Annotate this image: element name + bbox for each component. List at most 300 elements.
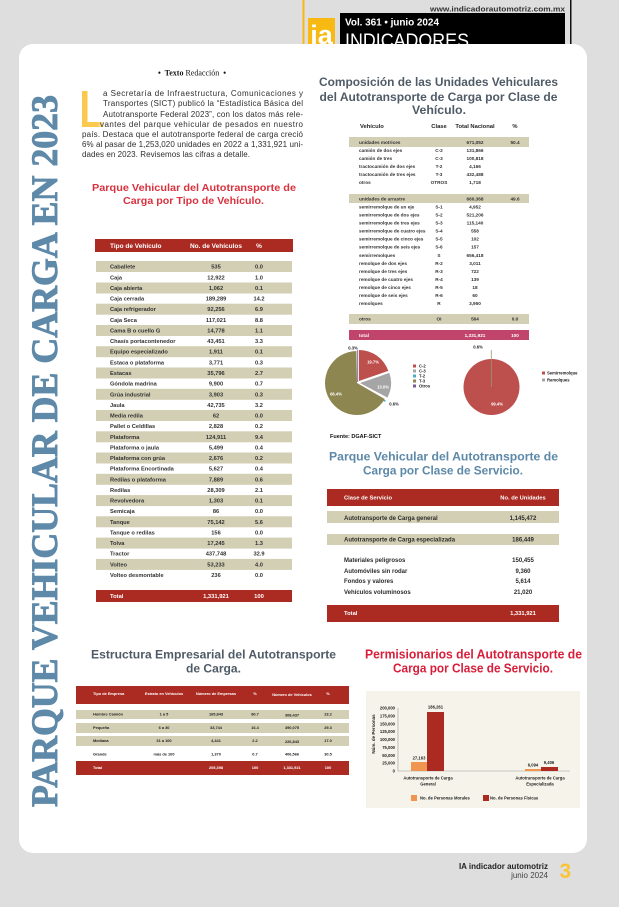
table rows: Tanque o redilas — [110, 530, 155, 536]
table rows: 189,289 — [206, 297, 226, 303]
table rows: 1.0 — [255, 275, 263, 281]
table: business structure — [76, 686, 349, 775]
table rows: 8.8 — [255, 318, 263, 324]
table rows: 1.3 — [255, 541, 263, 547]
section: motor units: 1,718 — [469, 180, 481, 185]
section: trailer units: 60 — [472, 293, 478, 298]
heading: business structure: Estructura Empresarial del Autotransporte — [91, 648, 336, 662]
table rows: 0.4 — [255, 467, 264, 473]
total row — [76, 761, 349, 775]
table header: % — [326, 691, 330, 696]
general cargo row — [327, 511, 559, 523]
table rows: 1,911 — [209, 350, 223, 356]
table rows: Cama B o cuello G — [110, 328, 161, 334]
table rows: Tolva — [110, 541, 125, 547]
table rows: 1,303 — [209, 499, 223, 505]
section: trailer units: remolque de tres ejes — [359, 269, 408, 274]
table rows: 35,796 — [207, 371, 225, 377]
heading: permit holders — [365, 648, 582, 676]
table rows: 2,828 — [209, 424, 223, 430]
section: trailer units: 139 — [471, 277, 479, 282]
table header: % — [256, 243, 262, 250]
table rows: 236 — [211, 573, 221, 579]
table rows: Plataforma Encortinada — [110, 467, 175, 473]
y axis labels: 0 — [393, 768, 396, 774]
table rows: 0.0 — [255, 414, 263, 420]
heading: vehicle class composition: Vehículo. — [412, 103, 466, 117]
section: motor units: 50.4 — [510, 140, 520, 145]
pie labels — [330, 346, 399, 406]
table rows: 23.2 — [324, 712, 333, 716]
specialised cargo row: Autotransporte de Carga especializada — [344, 538, 456, 544]
table rows: 31 a 100 — [156, 738, 172, 743]
section: motor units: 4,166 — [469, 164, 481, 169]
footer — [459, 860, 571, 883]
table rows: Caja refrigerador — [110, 307, 157, 313]
table rows: 0.2 — [255, 456, 263, 462]
heading: permit holders: Carga por Clase de Servicio. — [393, 662, 553, 676]
section: trailer units: R-5 — [435, 285, 443, 290]
total row: Total — [93, 765, 102, 770]
total row: 100 — [511, 333, 519, 338]
others row: otros — [359, 316, 371, 322]
table rows: 1,062 — [209, 286, 223, 292]
pie labels: 19.7% — [367, 360, 379, 364]
table rows: 1,370 — [211, 752, 221, 756]
bars: specialised cargo: 9,406 — [544, 760, 555, 765]
section: trailer units: 115,140 — [467, 220, 484, 226]
table rows: 4,441 — [211, 738, 222, 743]
table rows: 86 — [213, 509, 219, 515]
chart legend: No. de Personas Físicas — [490, 796, 539, 800]
heading: vehicle type: Carga por Tipo de Vehículo. — [123, 195, 264, 207]
table rows: Estacas — [110, 371, 132, 377]
table rows: Caballete — [110, 265, 135, 271]
table rows: Plataforma — [110, 435, 140, 441]
axes — [398, 708, 570, 771]
table rows: 2.1 — [255, 488, 263, 494]
table rows: 117,021 — [206, 318, 226, 324]
section: trailer units: 558 — [471, 228, 479, 234]
table rows: Redilas — [110, 488, 130, 494]
table header: Número de Vehículos — [272, 692, 312, 697]
heading: business structure: de Carga. — [186, 662, 241, 676]
table rows: 124,911 — [206, 435, 226, 441]
section: trailer units: remolque de cuatro ejes — [359, 277, 413, 282]
table rows: 406,566 — [285, 752, 300, 756]
table rows: 0.1 — [255, 286, 263, 292]
table rows: 226,843 — [285, 739, 300, 744]
pie legend: T-2 — [419, 374, 426, 378]
general cargo row: Autotransporte de Carga general — [344, 516, 438, 522]
pie legend: Otros — [419, 384, 431, 388]
category labels: General — [420, 782, 436, 786]
table rows: 0.1 — [255, 499, 263, 505]
specialised breakdown rows — [344, 558, 534, 596]
table rows: Equipo especializado — [110, 350, 168, 356]
table rows: 14,778 — [207, 328, 225, 334]
table total row: 1,331,921 — [203, 594, 230, 600]
section: motor units — [349, 137, 529, 185]
section: trailer units: remolques — [359, 301, 383, 306]
bars: general cargo: 27,163 — [413, 756, 426, 760]
remolques sliver — [490, 350, 492, 387]
bars: specialised cargo — [525, 760, 558, 771]
table rows — [93, 712, 333, 756]
intro paragraph — [82, 89, 304, 159]
section: trailer units: remolque de cinco ejes — [359, 285, 411, 290]
table rows: Caja Seca — [110, 318, 138, 324]
source note: Fuente: DGAF-SICT — [330, 434, 382, 440]
y axis labels: 75,000 — [382, 745, 396, 750]
others row: 0.0 — [512, 316, 519, 322]
section: trailer units: 722 — [471, 269, 479, 274]
section: motor units: C-2 — [435, 148, 443, 153]
table row stripes — [96, 261, 292, 570]
table rows: 0.7 — [255, 382, 263, 388]
heading: vehicle class composition: del Autotransporte de Carga por Clase de — [320, 90, 558, 104]
slice C-3 — [360, 373, 391, 398]
section: trailer units: semirremolque de un eje — [359, 204, 415, 210]
table rows: 165,843 — [209, 712, 224, 716]
table rows: Volteo desmontable — [110, 573, 164, 579]
intro paragraph: país. Destaca que el autotransporte federal de carga creció — [82, 130, 304, 139]
total row: total — [359, 333, 369, 338]
total row: 100 — [252, 765, 258, 770]
table header — [95, 239, 293, 252]
pie labels — [473, 344, 503, 406]
table rows: 4.0 — [255, 562, 263, 568]
section: trailer units: 18 — [472, 285, 478, 290]
heading: service class: Carga por Clase de Servicio. — [363, 464, 523, 478]
table header: Tipo de Empresa — [93, 691, 125, 696]
table header: % — [512, 124, 518, 130]
pie labels: 99.4% — [491, 402, 503, 406]
pie labels: 0.3% — [348, 346, 358, 350]
section: trailer units: remolque de seis ejes — [359, 293, 408, 298]
table rows: 14.2 — [253, 297, 265, 303]
table rows: 0.7 — [252, 752, 258, 756]
section: trailer units: 521,206 — [467, 212, 484, 218]
table rows: 17.0 — [324, 738, 332, 743]
total row — [327, 605, 559, 622]
intro paragraph: vantes del parque vehicular de pesados en nuestro — [100, 120, 304, 129]
slice C-2 — [359, 350, 388, 381]
table rows: 0.0 — [255, 573, 263, 579]
table rows: Media redila — [110, 414, 144, 420]
table header — [360, 124, 518, 130]
table rows: 53,233 — [207, 562, 225, 568]
pie legend: Remolques — [547, 378, 570, 382]
table rows: Plataforma o jaula — [110, 445, 160, 451]
website url: www.indicadorautomotriz.com.mx — [429, 4, 566, 14]
section: trailer units: R — [437, 301, 441, 306]
heading: vehicle type — [92, 182, 296, 207]
heading: service class — [329, 450, 558, 478]
table rows: 17,245 — [207, 541, 225, 547]
table rows: 3.3 — [255, 339, 263, 345]
y axis labels: 125,000 — [380, 729, 396, 734]
table: vehicles by type — [95, 239, 293, 602]
section: trailer units: R-2 — [435, 261, 443, 266]
drop cap letter L — [82, 91, 104, 127]
bars: general cargo: 186,261 — [428, 704, 444, 710]
pie legend: C-3 — [419, 368, 426, 374]
section: trailer units: unidades de arrastre — [359, 196, 406, 202]
table rows: Mediana — [93, 738, 109, 743]
table rows: 3,771 — [209, 360, 223, 366]
table rows: 6 a 30 — [159, 725, 169, 730]
section: trailer units: 3,011 — [469, 261, 481, 266]
table rows: 75,142 — [207, 520, 225, 526]
table rows: Chasís portacontenedor — [110, 339, 176, 345]
y axis labels: 200,000 — [380, 706, 396, 710]
table total row: 100 — [254, 594, 264, 600]
chart panel — [366, 691, 580, 808]
table header: Tipo de Vehículo — [110, 243, 162, 250]
table rows: Revolvedora — [110, 499, 145, 505]
y axis labels: 50,000 — [382, 753, 396, 758]
table rows: 5.6 — [255, 520, 263, 526]
table header: Estrato en Vehículos — [145, 691, 183, 696]
table rows: Tractor — [110, 552, 130, 558]
black header band: Vol. 361 • junio 2024 — [345, 18, 439, 28]
table header: Vehículo — [360, 124, 384, 130]
table rows: Caja abierta — [110, 286, 143, 292]
section: trailer units: semirremolques — [359, 253, 396, 258]
section: motor units: tractocamión de dos ejes — [359, 164, 416, 169]
table: units by service class — [327, 489, 559, 622]
intro paragraph: dades en 2023. Revisemos las cifras a detalle. — [82, 150, 250, 159]
icon: ia logo: ia — [310, 20, 334, 50]
specialised cargo row: 186,449 — [512, 538, 534, 544]
pie chart: trailer units — [464, 344, 578, 415]
pie legend — [413, 364, 431, 388]
table rows: 0.2 — [255, 424, 263, 430]
table rows: 390,075 — [285, 725, 300, 730]
section: motor units: 671,052 — [467, 140, 484, 145]
table rows: 9.4 — [255, 435, 264, 441]
table total row: Total — [110, 594, 124, 600]
section: motor units: C-3 — [435, 156, 443, 161]
section: motor units: camión de tres — [359, 156, 392, 161]
heading: permit holders: Permisionarios del Autotransporte de — [365, 648, 582, 662]
others row: OI — [437, 316, 441, 322]
page number: 3 — [560, 860, 571, 883]
bar chart: permit holders — [366, 691, 580, 808]
table total row — [96, 590, 292, 602]
specialised breakdown rows: Automóviles sin rodar — [344, 569, 408, 575]
y axis labels: 150,000 — [380, 721, 396, 726]
table rows: 9,900 — [209, 382, 223, 388]
table rows: 43,451 — [207, 339, 225, 345]
bars: specialised cargo: 6,094 — [528, 762, 539, 768]
table rows: Redilas o plataforma — [110, 477, 167, 483]
table rows: 2.7 — [255, 371, 263, 377]
y axis labels: 175,000 — [380, 713, 396, 718]
section: trailer units: S — [437, 253, 441, 258]
pie labels: 0.6% — [389, 402, 399, 406]
section: motor units: 100,818 — [467, 156, 484, 161]
section: trailer units: S-5 — [435, 236, 443, 242]
slice T-3 — [325, 351, 385, 415]
table header: No. de Vehículos — [190, 243, 242, 250]
section: trailer units: 3,950 — [469, 301, 481, 306]
table: composition by vehicle class — [349, 124, 529, 340]
others row — [349, 314, 529, 324]
section: trailer units: 102 — [471, 236, 479, 242]
heading: business structure — [91, 648, 336, 676]
section: motor units: T-3 — [436, 172, 443, 177]
black header band — [340, 13, 565, 52]
category labels: Autotransporte de Carga — [403, 776, 453, 780]
table rows: Caja cerrada — [110, 297, 145, 303]
pie legend: Semirremolque — [547, 370, 578, 376]
section: motor units: T-2 — [436, 164, 443, 169]
section: trailer units: semirremolque de tres ejes — [359, 220, 420, 226]
heading: vehicle type: Parque Vehicular del Autotransporte de — [92, 182, 296, 194]
section: trailer units: remolque de dos ejes — [359, 261, 407, 266]
table rows: 30.5 — [324, 752, 333, 756]
section: trailer units: 4,952 — [469, 204, 481, 210]
table rows: 437,748 — [206, 552, 226, 558]
section: trailer units: 656,418 — [467, 253, 484, 258]
table rows: 92,256 — [207, 307, 225, 313]
table rows: Estaca o plataforma — [110, 360, 165, 366]
table rows: 0.3 — [255, 360, 263, 366]
table rows: 3,903 — [209, 392, 223, 398]
table header: % — [253, 691, 257, 696]
pie labels: 13.0% — [377, 384, 389, 390]
specialised breakdown rows: Fondos y valores — [344, 579, 394, 585]
table header: Total Nacional — [455, 124, 495, 130]
table rows: Caja — [110, 275, 123, 281]
specialised breakdown rows: Materiales peligrosos — [344, 558, 406, 564]
heading: service class: Parque Vehicular del Autotransporte de — [329, 450, 558, 464]
table rows: 0.0 — [255, 530, 263, 536]
others row: 564 — [471, 316, 479, 322]
specialised breakdown rows: 21,020 — [514, 590, 533, 596]
table rows: Tanque — [110, 520, 130, 526]
table rows: 5,627 — [209, 467, 223, 473]
table rows: 12,922 — [207, 275, 225, 281]
section: trailer units: S-4 — [435, 228, 443, 234]
table rows: 7,889 — [209, 477, 223, 483]
table rows: 535 — [211, 265, 221, 271]
table rows: Semicaja — [110, 509, 136, 515]
total row: 1,331,921 — [510, 611, 537, 617]
category labels: Especializada — [526, 782, 554, 786]
table header: No. de Unidades — [500, 496, 546, 502]
specialised cargo row — [327, 534, 559, 545]
slice otros — [357, 350, 359, 382]
section: trailer units: R-6 — [435, 293, 443, 298]
total row: Total — [344, 611, 358, 617]
table rows: 3.2 — [255, 403, 263, 409]
pie legend — [542, 370, 578, 382]
section: motor units: OTROS — [431, 180, 447, 185]
table header: Clase de Servicio — [344, 496, 392, 502]
table rows: 42,735 — [207, 403, 225, 409]
intro paragraph: Autotransporte Federal 2023”, con los datos más rele- — [103, 110, 303, 119]
table rows: Grande — [93, 752, 107, 756]
section: motor units: otros — [359, 180, 371, 185]
table rows: 28,309 — [207, 488, 225, 494]
section: trailer units: S-3 — [435, 220, 443, 226]
section: trailer units: semirremolque de dos ejes — [359, 212, 420, 218]
section: trailer units: S-6 — [435, 244, 443, 250]
total row: 100 — [325, 765, 331, 770]
row stripes — [76, 710, 349, 746]
section: motor units: unidades motrices — [359, 140, 401, 145]
slice T-2 — [358, 386, 385, 402]
table rows: 32.9 — [253, 552, 265, 558]
table rows: 5,499 — [209, 445, 223, 451]
table header: Clase — [431, 124, 448, 130]
magazine header — [302, 0, 572, 52]
section: motor units: 131,866 — [467, 148, 484, 153]
black header band: INDICADORES — [345, 31, 469, 52]
y axis labels: 25,000 — [382, 761, 396, 766]
total row — [349, 330, 529, 340]
bars: general cargo — [411, 704, 444, 771]
table rows: Pallet o Celdillas — [110, 424, 155, 430]
section: trailer units: R-3 — [435, 269, 443, 274]
table header — [327, 489, 559, 506]
section: motor units: 432,488 — [467, 172, 484, 177]
table rows: 0.6 — [255, 477, 263, 483]
y axis title: Núm. de Personas — [371, 714, 376, 754]
section: trailer units: semirremolque de cinco ejes — [359, 236, 424, 242]
total row: 1,331,921 — [283, 765, 301, 770]
total row: 1,331,921 — [465, 333, 486, 338]
specialised breakdown rows: 9,360 — [515, 569, 531, 575]
chart legend: No. de Personas Morales — [420, 796, 470, 800]
specialised breakdown rows: 150,455 — [512, 558, 534, 564]
section: trailer units: R-4 — [435, 277, 443, 282]
table rows: más de 100 — [154, 752, 174, 756]
section: trailer units: S-2 — [435, 212, 443, 218]
table header — [76, 686, 349, 704]
specialised breakdown rows: Vehículos voluminosos — [344, 590, 411, 596]
table rows: 33,744 — [210, 725, 223, 730]
vertical title: PARQUE VEHICULAR DE CARGA EN 2023 — [25, 95, 66, 807]
table rows: Grúa industrial — [110, 392, 151, 398]
table rows: 0.4 — [255, 445, 264, 451]
table rows: 2,676 — [209, 456, 223, 462]
intro paragraph: 6% al pasar de 1,253,020 unidades en 2022 a 1,331,921 uni- — [82, 140, 303, 149]
table rows: 308,437 — [285, 712, 299, 718]
table rows: 0.0 — [255, 265, 263, 271]
section: trailer units: semirremolque de seis ejes — [359, 244, 421, 250]
table rows: 1.1 — [255, 328, 263, 334]
y axis labels — [380, 706, 396, 774]
table rows: 62 — [213, 414, 219, 420]
pie legend: C-2 — [419, 364, 426, 368]
table rows: 29.3 — [324, 725, 333, 730]
section: motor units: tractocamión de tres ejes — [359, 172, 416, 177]
table rows: 1 a 5 — [160, 712, 169, 716]
footer: junio 2024 — [510, 871, 549, 880]
byline: • Texto Redacción • — [158, 68, 226, 78]
category labels: Autotransporte de Carga — [515, 776, 565, 780]
table rows: 0.0 — [255, 509, 263, 515]
section: trailer units: 49.6 — [510, 196, 520, 202]
table rows: 6.9 — [255, 307, 263, 313]
table rows: Góndola madrina — [110, 382, 158, 388]
section: trailer units: semirremolque de cuatro ejes — [359, 228, 426, 234]
table rows: 156 — [211, 530, 221, 536]
